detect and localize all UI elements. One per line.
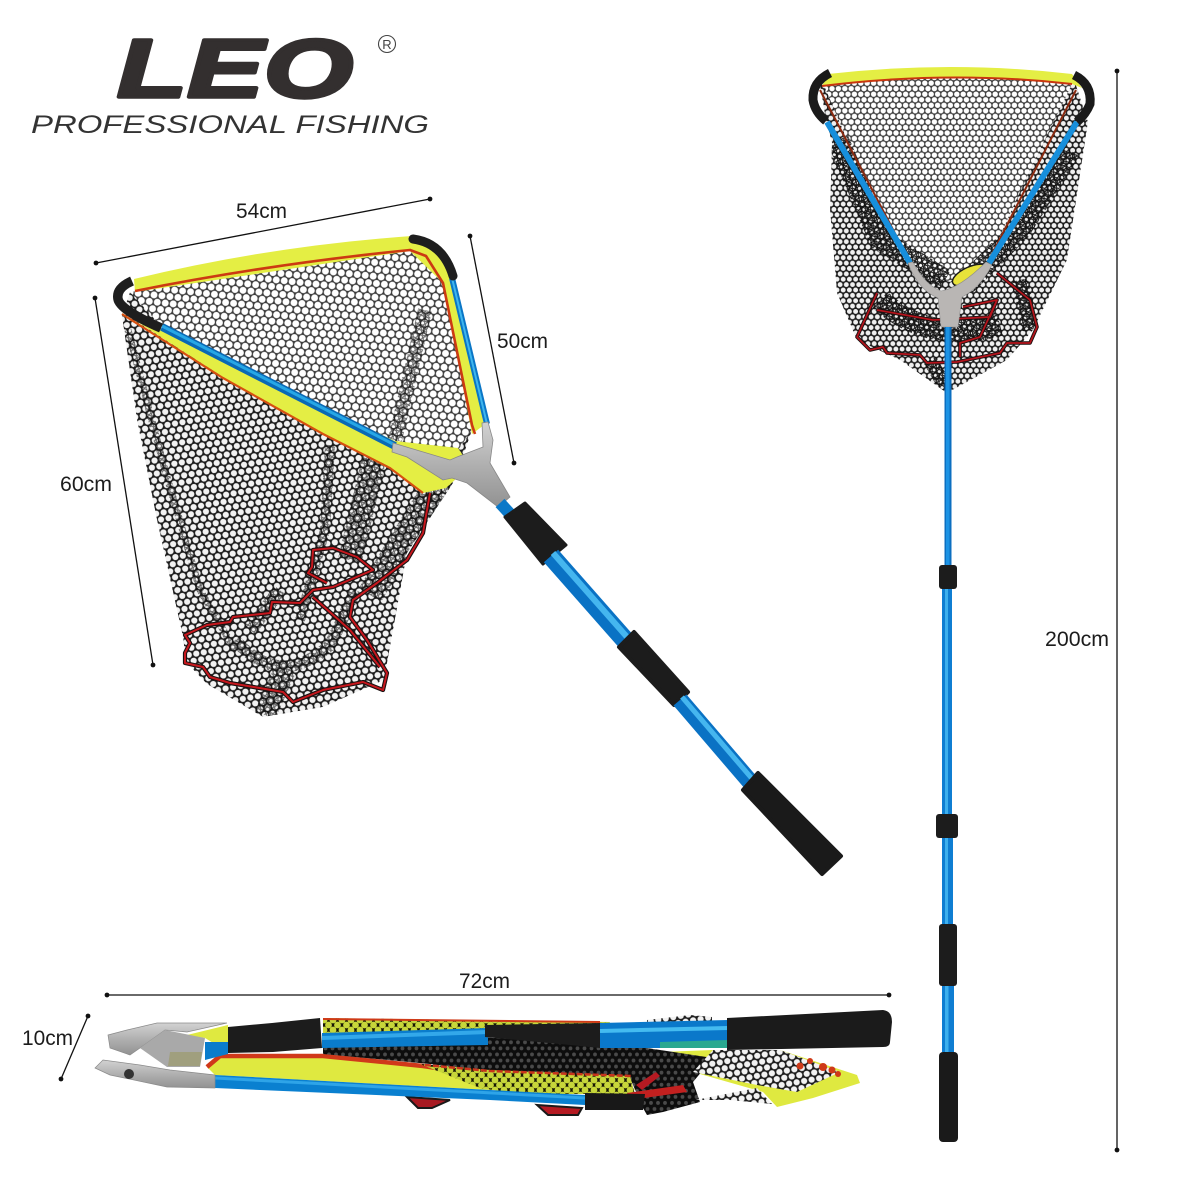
dimension: net width 54cm (94, 197, 432, 265)
dimension: folded length 72cm: 72cm (459, 970, 510, 993)
product: folded net (95, 1010, 892, 1115)
dimension: arm length 50cm (468, 234, 548, 465)
logo wordmark: LEO (117, 22, 353, 115)
angled net mesh (122, 250, 472, 717)
front net silver hub (908, 262, 992, 327)
dimension: folded thickness 10cm (22, 1014, 90, 1081)
registered mark: R (382, 37, 392, 52)
angled net arms (118, 239, 487, 446)
angled net silver hub (392, 422, 510, 507)
front net red trim (857, 273, 1037, 363)
front net yellow rim (820, 67, 1082, 262)
folded lower blue bar (215, 1075, 645, 1110)
dimension: net depth 60cm: 60cm (60, 473, 112, 496)
folded upper handle (205, 1010, 892, 1060)
folded net red straps (407, 1072, 687, 1115)
logo tagline: PROFESSIONAL FISHING (31, 111, 429, 139)
dimension: folded length 72cm (105, 970, 891, 997)
folded net yellow fabric (187, 1025, 860, 1107)
dimension: total length 200cm (1045, 69, 1119, 1152)
product: front view extended net (813, 67, 1090, 1142)
product: angled landing net (118, 236, 841, 874)
front net mesh (820, 76, 1088, 393)
angled net red trim (185, 493, 430, 702)
angled net yellow rim (122, 236, 484, 493)
extended telescopic pole (936, 327, 958, 1142)
dimension: folded thickness 10cm: 10cm (22, 1027, 73, 1050)
registered mark (378, 36, 396, 52)
logo: LEO Professional Fishing (31, 22, 429, 139)
front net yellow pad (949, 260, 991, 290)
folded silver clamp (95, 1023, 227, 1088)
front net arms and corners (813, 73, 1090, 263)
folded net mesh bands (323, 1015, 841, 1115)
angled net telescopic handle (500, 503, 841, 874)
dimension: net depth 60cm (60, 296, 155, 667)
dimension: arm length 50cm: 50cm (497, 330, 548, 353)
dimension: total length 200cm: 200cm (1045, 628, 1109, 651)
dimension: net width 54cm: 54cm (236, 200, 287, 223)
